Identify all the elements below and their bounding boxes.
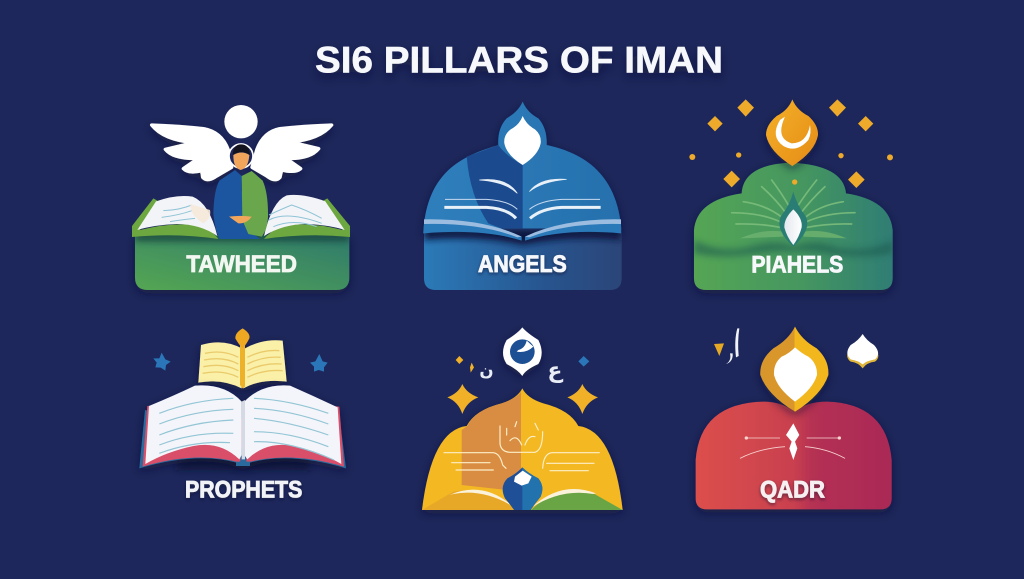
panel: qadr [696, 327, 892, 509]
icon: white drop [504, 116, 541, 165]
icon: calligraphy [444, 422, 599, 471]
dome [423, 102, 622, 233]
icon: head circle [224, 105, 258, 138]
icon: gold stars [689, 99, 893, 188]
panel: tawheed [132, 105, 350, 290]
icon: stars [153, 353, 328, 372]
arabic marks right: ع [547, 358, 563, 383]
arabic marks: ن [479, 361, 494, 380]
title: SI6 PILLARS OF IMAN [315, 40, 723, 80]
icon: leaves [732, 180, 855, 238]
label: prophets: PROPHETS [185, 476, 302, 503]
panel: angels [423, 102, 622, 290]
icon: book white edge right [532, 489, 596, 507]
label: qadr: QADR [760, 476, 825, 503]
label box [424, 228, 622, 290]
icon: large open book [139, 385, 346, 468]
icon: wings [152, 125, 332, 180]
icon: white emblem [503, 327, 542, 376]
icon: small yellow book [198, 340, 287, 388]
red dome [696, 402, 892, 509]
icon: gold drop [760, 327, 828, 412]
under-book shadow [177, 452, 310, 470]
icon: person [213, 144, 268, 239]
label: piahels: PIAHELS [751, 251, 843, 278]
green cloud dome [694, 163, 893, 290]
green label box [135, 235, 349, 290]
label: tawheed: TAWHEED [186, 251, 297, 278]
icon: center sparkle [740, 423, 845, 460]
icon: book white edge [449, 490, 513, 507]
panel: books [422, 327, 623, 510]
arabic marks white [726, 328, 739, 364]
dome orange fold [462, 392, 521, 490]
icon: sparkles [447, 356, 598, 414]
icon: gold crescent drop [766, 99, 818, 166]
box inner shadow [135, 232, 349, 242]
arabic marks gold [714, 343, 724, 356]
box inner shadow [424, 228, 622, 245]
icon: teal drop [779, 192, 807, 247]
icon: open book pages [424, 179, 621, 241]
icon: blue emblem [503, 467, 542, 510]
panel: piahels [689, 99, 893, 290]
icon: book gold page [422, 490, 513, 510]
icon: gold pin [235, 328, 250, 348]
dome dark fold [467, 145, 523, 237]
icon: small white drop [847, 334, 878, 368]
label: angels: ANGELS [478, 251, 567, 278]
icon: blue diamond [578, 356, 589, 367]
panel: prophets [139, 328, 346, 503]
icon: white drop [784, 209, 802, 245]
dome [422, 388, 623, 510]
cloud fold shadow [694, 240, 893, 256]
icon: open book [132, 195, 350, 239]
icon: book green page [532, 491, 623, 510]
